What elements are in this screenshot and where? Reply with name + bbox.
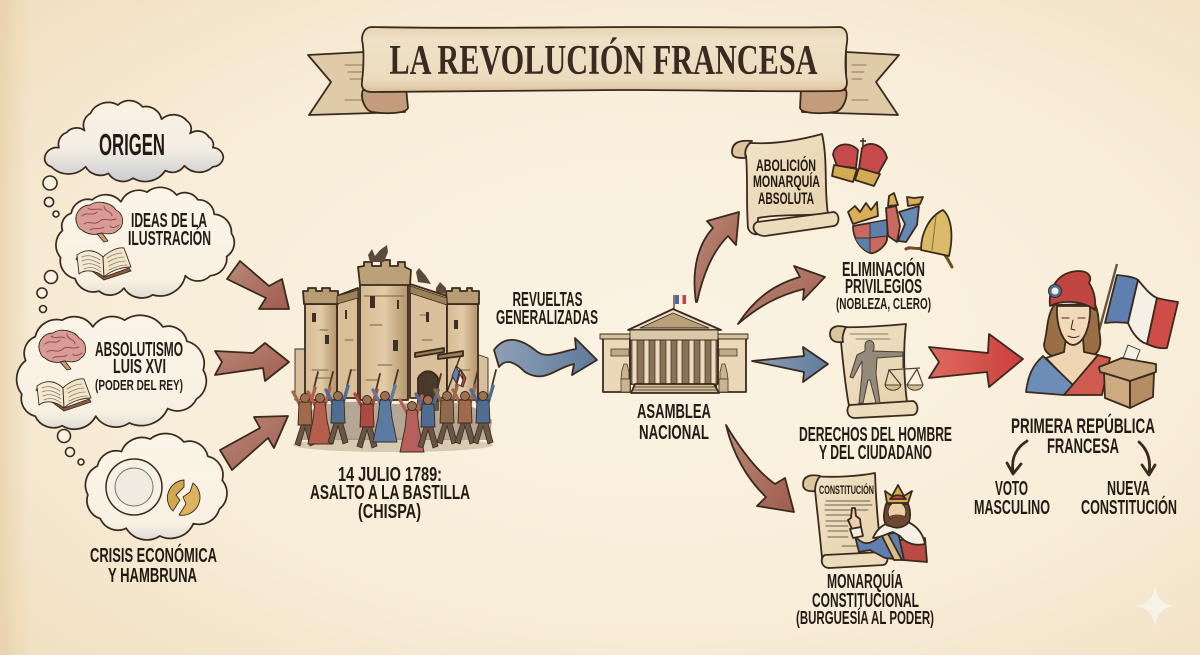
icon: bishop mitre xyxy=(906,210,952,267)
flag on roof xyxy=(674,295,686,309)
label: monarquía constitucional xyxy=(796,570,934,628)
label: eliminación privilegios xyxy=(836,257,931,313)
label: crisis económica xyxy=(90,543,217,587)
panel: monarquía constitucional xyxy=(796,473,934,628)
icon: brain xyxy=(76,202,123,242)
building wings xyxy=(603,336,746,392)
panel: abolición monarquía absoluta xyxy=(732,134,952,313)
windows xyxy=(312,296,458,351)
arrow: to eliminación xyxy=(738,266,825,324)
icon: tricolor flag in crowd xyxy=(447,357,466,392)
panel: abolición monarquía absoluta: ABOLICIÓN xyxy=(756,156,816,175)
label: derechos del hombre: Y DEL CIUDADANO xyxy=(819,442,932,464)
label: voto masculino xyxy=(974,478,1050,519)
cloud: crisis económica xyxy=(85,433,227,540)
label: eliminación privilegios: PRIVILEGIOS xyxy=(845,276,922,298)
arrow: to nueva constitución xyxy=(1139,442,1155,475)
cloud: origen: ORIGEN xyxy=(99,127,165,162)
red sash xyxy=(1064,355,1110,395)
neck and chest xyxy=(1046,338,1098,386)
icon: open book xyxy=(36,379,91,411)
wing plaques xyxy=(611,349,737,356)
pediment xyxy=(628,309,721,330)
scales xyxy=(885,352,923,390)
panel: primera república francesa xyxy=(974,264,1178,519)
illustration: asamblea nacional building xyxy=(600,295,748,393)
scroll xyxy=(732,134,838,236)
rooftop figures xyxy=(368,245,446,294)
title: LA REVOLUCIÓN FRANCESA xyxy=(390,37,818,84)
icon: sparkle watermark xyxy=(1136,586,1174,626)
cloud: absolutismo luis xvi xyxy=(17,315,206,429)
human figure xyxy=(850,340,903,403)
label: voto masculino: MASCULINO xyxy=(974,497,1050,519)
panel: abolición monarquía absoluta: MONARQUÍA xyxy=(753,172,820,191)
icon: broken crown xyxy=(832,138,887,186)
cloud: absolutismo luis xvi: ABSOLUTISMO xyxy=(95,339,183,361)
thought bubbles: middle xyxy=(37,270,58,312)
label: primera república francesa: FRANCESA xyxy=(1047,435,1119,458)
cloud: origen xyxy=(45,101,223,182)
icon: broken shields xyxy=(848,193,923,253)
icon: broken coin xyxy=(167,480,200,515)
face xyxy=(1057,306,1090,345)
banner left curl xyxy=(362,88,408,113)
cloud: ideas de la ilustración xyxy=(56,187,234,298)
label: asamblea nacional xyxy=(637,401,711,444)
label: asalto a la bastilla xyxy=(310,464,470,523)
panel: origen xyxy=(17,101,234,587)
drawbridge beams xyxy=(415,348,463,359)
label: primera república francesa xyxy=(1011,414,1155,458)
icon: empty plate xyxy=(106,459,162,515)
blue dress xyxy=(1026,356,1073,395)
arrow: absolutismo to bastilla xyxy=(215,343,289,381)
thought bubbles: lower xyxy=(58,430,84,465)
title banner xyxy=(308,27,899,115)
label: derechos del hombre xyxy=(799,424,952,464)
phrygian cap xyxy=(1050,271,1095,310)
columns xyxy=(632,340,716,384)
hair xyxy=(1044,304,1100,357)
banner right curl xyxy=(800,88,847,113)
label: revueltas generalizadas: GENERALIZADAS xyxy=(496,307,598,329)
scroll with human figure and scales xyxy=(830,324,923,418)
banner left tail xyxy=(308,52,405,115)
label: asalto a la bastilla: ASALTO A LA BASTILLA xyxy=(310,482,470,504)
thought bubbles: upper xyxy=(43,176,59,217)
arrow: crisis to bastilla xyxy=(220,416,288,470)
steps xyxy=(631,384,719,393)
icon: crowd of revolutionaries xyxy=(293,370,496,452)
arrow: wavy blue xyxy=(494,338,597,376)
label: eliminación privilegios: (NOBLEZA, CLERO) xyxy=(836,296,931,313)
cockade xyxy=(1048,284,1062,298)
label: crisis económica: CRISIS ECONÓMICA xyxy=(90,543,217,567)
arrow: up to abolición xyxy=(695,212,739,302)
label: asamblea nacional: ASAMBLEA xyxy=(637,401,711,423)
label: crisis económica: Y HAMBRUNA xyxy=(108,565,197,587)
label: revueltas generalizadas xyxy=(496,289,598,329)
icon: brain xyxy=(39,330,86,370)
label: nueva constitución xyxy=(1081,478,1177,519)
illustration: asalto a la bastilla xyxy=(293,245,496,452)
banner right tail xyxy=(802,52,899,115)
label: derechos del hombre: DERECHOS DEL HOMBRE xyxy=(799,424,952,446)
label: nueva constitución: NUEVA xyxy=(1107,478,1150,500)
icon: king with crown xyxy=(848,485,927,562)
statues xyxy=(621,364,728,392)
label: monarquía constitucional: CONSTITUCIONAL xyxy=(812,590,919,612)
cloud: ideas de la ilustración: IDEAS DE LA xyxy=(131,210,207,232)
gate xyxy=(418,371,438,410)
label: monarquía constitucional: MONARQUÍA xyxy=(827,570,903,593)
label: eliminación privilegios: ELIMINACIÓN xyxy=(842,257,925,281)
building main body xyxy=(630,338,718,384)
arrow: down to monarquía constitucional xyxy=(726,425,794,512)
panel: abolición monarquía absoluta: ABSOLUTA xyxy=(758,189,814,208)
arrow: ilustración to bastilla xyxy=(227,261,289,309)
scroll with constitution heading: CONSTITUCIÓN xyxy=(819,482,874,497)
arrow: red to república xyxy=(929,334,1023,387)
label: asalto a la bastilla: (CHISPA) xyxy=(358,501,421,523)
label: asalto a la bastilla: 14 JULIO 1789: xyxy=(338,464,442,486)
cloud: ideas de la ilustración: ILUSTRACIÓN xyxy=(128,226,211,250)
cloud: absolutismo luis xvi: LUIS XVI xyxy=(113,356,166,378)
label: voto masculino: VOTO xyxy=(995,478,1028,500)
cloud: absolutismo luis xvi: (PODER DEL REY) xyxy=(95,377,183,394)
icon: open book xyxy=(76,248,131,280)
label: revueltas generalizadas: REVUELTAS xyxy=(512,289,582,311)
label: asamblea nacional: NACIONAL xyxy=(639,422,709,444)
icon: fortress xyxy=(295,245,488,410)
scroll with constitution heading xyxy=(803,473,888,568)
label: monarquía constitucional: (BURGUESÍA AL PODER) xyxy=(796,607,934,628)
banner main ribbon xyxy=(362,27,847,92)
icon: french flag xyxy=(1096,264,1178,348)
panel: derechos del hombre xyxy=(799,324,952,464)
icon: marianne xyxy=(1026,271,1110,395)
icon: ballot box xyxy=(1099,345,1156,408)
banner tail fold lines xyxy=(345,65,868,100)
arrow: to voto masculino xyxy=(1007,441,1027,474)
arrow: blue to derechos xyxy=(752,347,828,382)
